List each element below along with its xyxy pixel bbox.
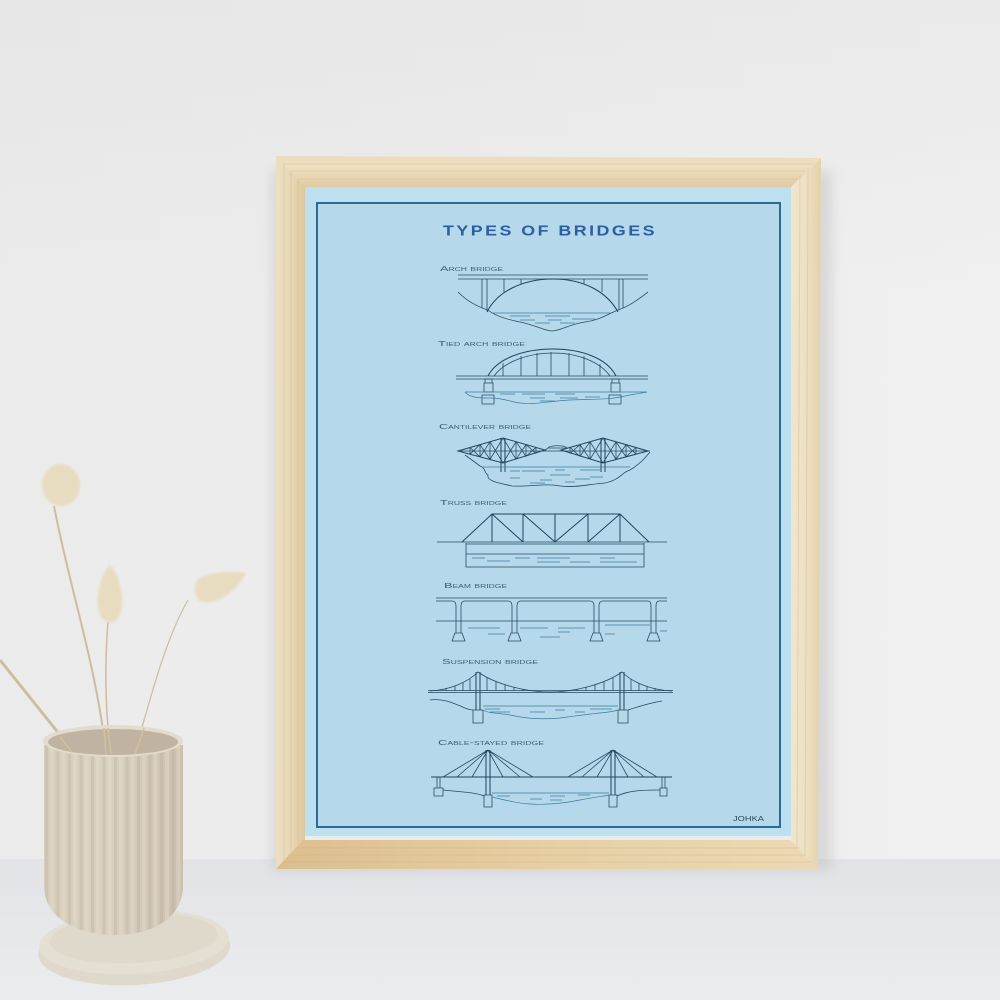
flower heads	[42, 464, 246, 622]
frame shadow	[272, 170, 832, 871]
bridge: cantilever	[439, 422, 650, 487]
wooden frame	[276, 156, 821, 869]
bridge: cable-stayed	[431, 738, 672, 807]
stems	[0, 506, 188, 752]
poster	[305, 187, 791, 840]
bridge: truss	[437, 498, 667, 567]
label: tied arch bridge: Tied arch bridge	[438, 339, 526, 348]
background: shelf	[0, 859, 1000, 1000]
arch drawing	[458, 275, 648, 331]
bridge: beam	[436, 581, 667, 641]
bridge: arch	[440, 264, 648, 331]
saucer	[36, 905, 232, 990]
cable-stayed drawing	[431, 750, 672, 807]
cantilever drawing	[458, 438, 650, 487]
bridge: suspension	[428, 657, 673, 723]
label: cantilever bridge: Cantilever bridge	[439, 422, 532, 431]
label: truss bridge: Truss bridge	[440, 498, 508, 507]
bridge: tied arch	[438, 339, 648, 404]
truss drawing	[437, 514, 667, 567]
suspension drawing	[428, 672, 673, 723]
beam drawing	[436, 598, 667, 641]
tied arch drawing	[456, 349, 648, 404]
label: beam bridge: Beam bridge	[444, 581, 508, 590]
signature: JOHKA	[733, 814, 764, 823]
ribbed vase	[43, 725, 183, 935]
dried flowers	[0, 464, 246, 752]
label: arch bridge: Arch bridge	[440, 264, 504, 273]
label: suspension bridge: Suspension bridge	[442, 657, 539, 666]
label: cable-stayed bridge: Cable-stayed bridge	[438, 738, 545, 747]
title: TYPES OF BRIDGES	[443, 224, 657, 240]
